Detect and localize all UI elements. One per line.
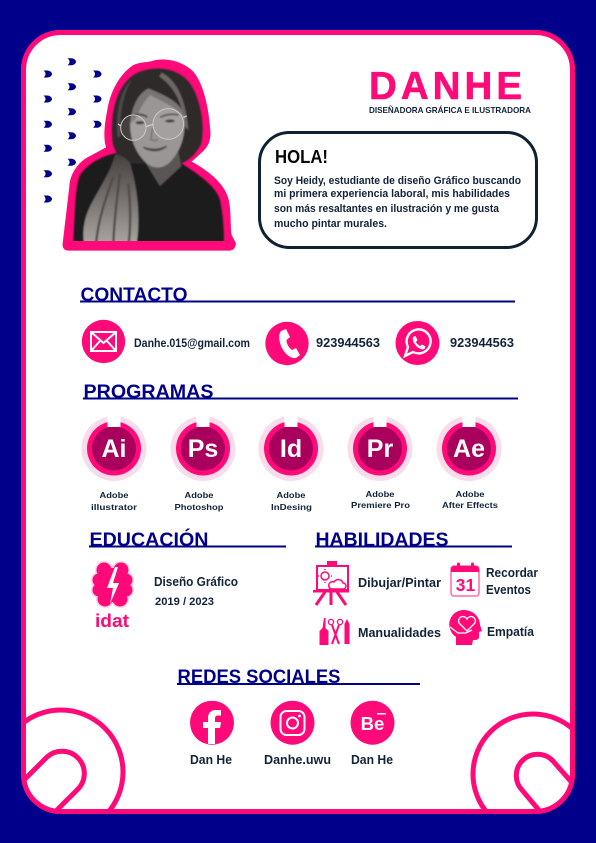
skill: crafts: [320, 618, 441, 645]
education: idat logo: idat: [95, 611, 129, 631]
program: illustrator: Adobe: [100, 490, 129, 500]
program: illustrator: [82, 415, 146, 512]
skill: calendar: Recordar: [486, 566, 538, 580]
program: photoshop: Ps: [188, 435, 218, 463]
program: premiere: Adobe: [366, 489, 395, 499]
portrait photo with pink outline: [63, 60, 236, 251]
social: behance: Dan He: [351, 753, 393, 767]
social: facebook: Dan He: [190, 753, 232, 767]
intro text: [274, 175, 521, 230]
program: photoshop: Adobe: [184, 490, 214, 500]
social: instagram: Danhe.uwu: [264, 753, 331, 767]
contact: email: [82, 320, 250, 363]
program: after effects: Adobe: [456, 489, 485, 499]
decoration: bottom left circle: [26, 708, 126, 809]
intro text: son más resaltantes en ilustración y me gusta: [274, 203, 500, 215]
decorative chevrons: [44, 58, 102, 203]
program: premiere: Pr: [367, 435, 393, 463]
education: idat logo: [91, 561, 134, 631]
skill: empathy: Empatía: [487, 625, 535, 639]
education: text: [154, 575, 238, 608]
skill: empathy: [449, 610, 535, 645]
section: educacion heading: EDUCACIÓN: [90, 529, 208, 551]
social: instagram: [264, 701, 331, 767]
intro heading: HOLA!: [275, 147, 328, 167]
social: behance: Be: [361, 713, 384, 734]
title: DANHE: [369, 65, 522, 108]
program: after effects: After Effects: [442, 500, 498, 510]
program: indesign: Adobe: [276, 490, 306, 500]
program: after effects: [436, 415, 502, 510]
program: premiere: Premiere Pro: [351, 500, 410, 510]
skill: calendar: 31: [456, 575, 475, 595]
program: indesign: [258, 415, 324, 512]
program: after effects: Ae: [453, 435, 485, 463]
section: programas heading: PROGRAMAS: [84, 382, 214, 403]
skill: draw and paint: [313, 561, 441, 605]
section: contacto heading: CONTACTO: [80, 285, 188, 306]
skill: crafts: Manualidades: [358, 626, 441, 640]
decoration: bottom right circle: [470, 712, 570, 809]
intro text: Soy Heidy, estudiante de diseño Gráfico buscando: [274, 175, 521, 187]
program: illustrator: illustrator: [91, 502, 138, 512]
contact: phone: 923944563: [316, 335, 380, 350]
program: photoshop: [170, 415, 236, 512]
program: indesign: InDesing: [271, 502, 312, 512]
contact: phone: [265, 322, 380, 365]
program: indesign: Id: [280, 435, 302, 463]
program: premiere: [348, 415, 412, 510]
social: behance: [350, 701, 394, 767]
program: illustrator: Ai: [102, 435, 126, 463]
contact: email: Danhe.015@gmail.com: [134, 338, 250, 350]
skill: calendar: [451, 562, 538, 597]
education: text: 2019 / 2023: [155, 596, 214, 608]
social: facebook: [190, 701, 234, 767]
skill: draw and paint: Dibujar/Pintar: [358, 576, 441, 590]
intro text: mi primera experiencia laboral, mis habilidades: [274, 188, 510, 200]
section: habilidades heading: HABILIDADES: [316, 530, 448, 551]
subtitle: DISEÑADORA GRÁFICA E ILUSTRADORA: [369, 105, 531, 115]
intro text: mucho pintar murales.: [274, 218, 387, 230]
skill: calendar: Eventos: [486, 583, 531, 597]
program: photoshop: Photoshop: [174, 502, 224, 512]
contact: whatsapp: [396, 321, 514, 365]
contact: whatsapp: 923944563: [450, 335, 514, 350]
intro panel: [260, 132, 536, 248]
section: redes sociales heading: REDES SOCIALES: [178, 667, 340, 688]
education: text: Diseño Gráfico: [154, 575, 238, 589]
